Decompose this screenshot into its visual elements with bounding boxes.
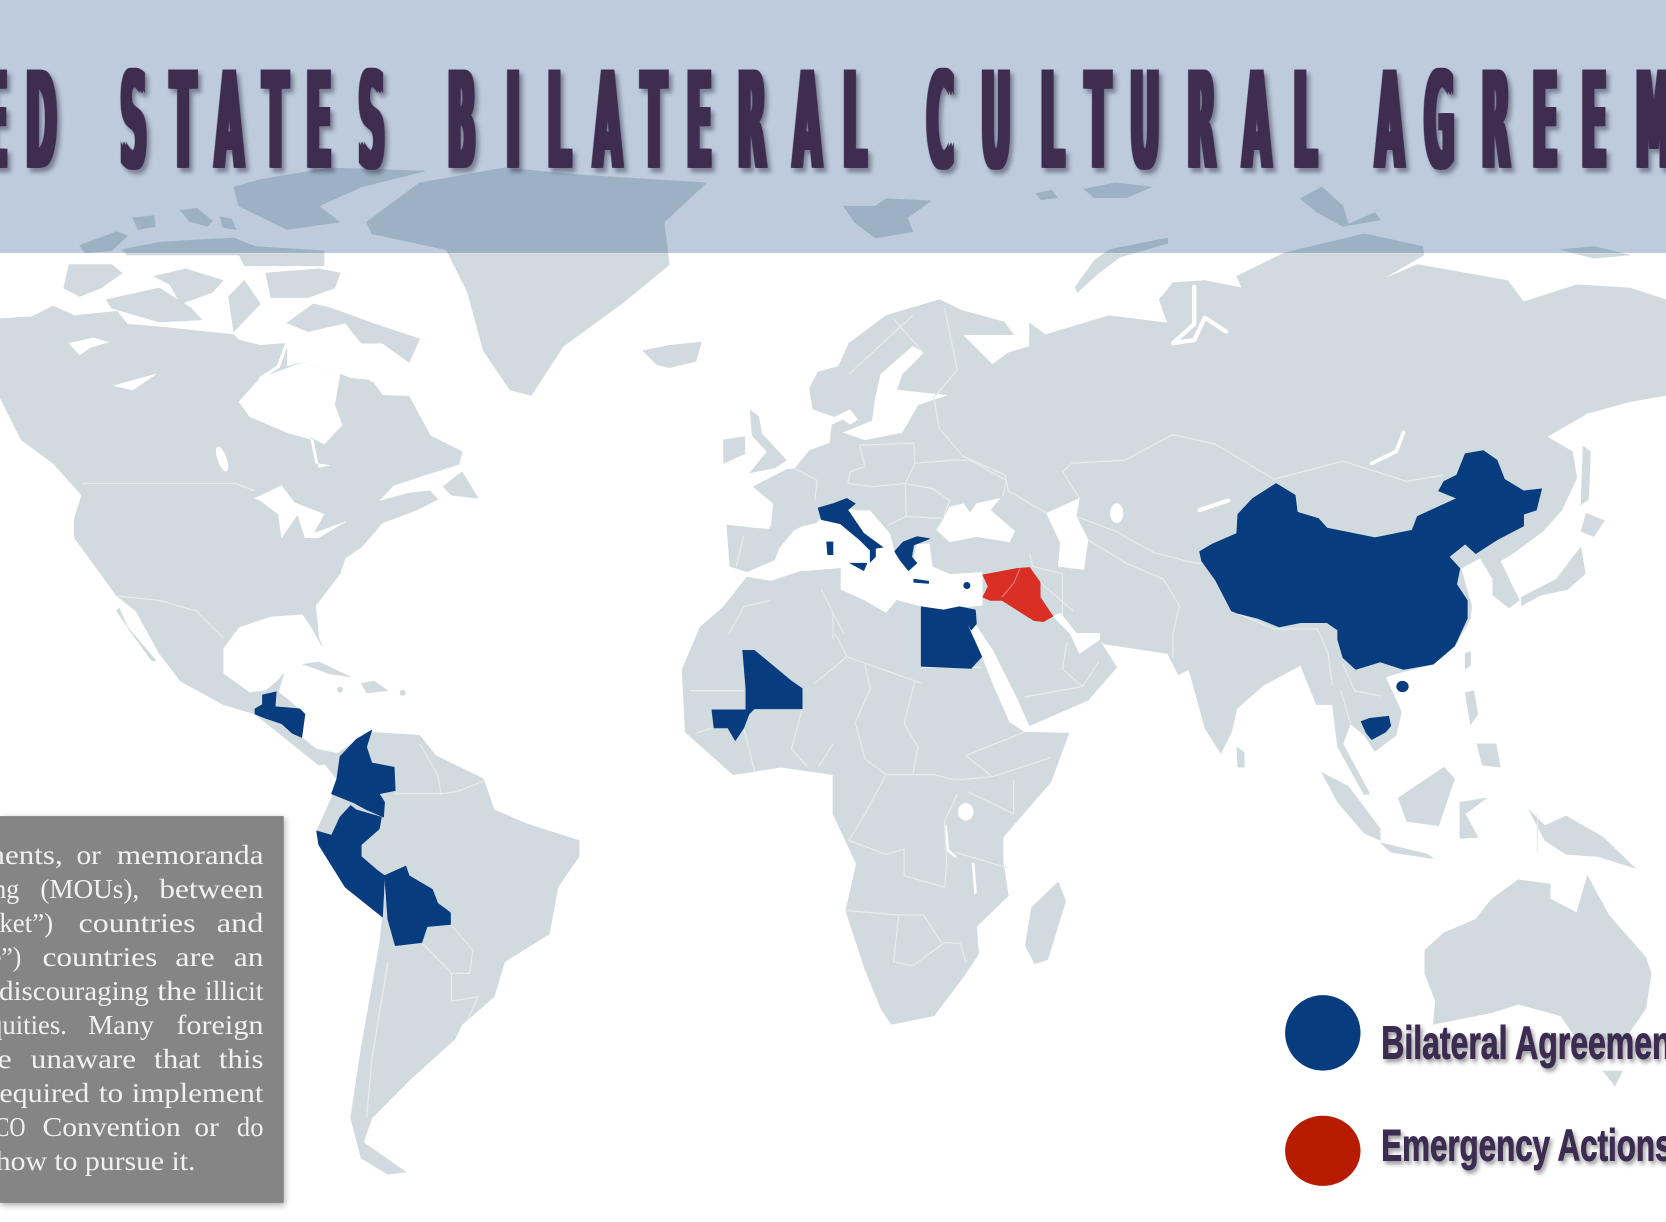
country: Cambodia	[1361, 716, 1391, 740]
country: Cyprus	[964, 582, 970, 589]
country: Greece	[895, 537, 930, 583]
country: Mali	[712, 650, 802, 741]
land: australia	[1425, 876, 1651, 1086]
countries: Central America	[255, 692, 305, 737]
legend	[1285, 995, 1666, 1186]
explanatory text: to	[99, 1077, 123, 1108]
explanatory text: Many	[88, 1009, 154, 1040]
african lakes	[946, 803, 975, 893]
seas and lakes of eurasia	[844, 287, 1404, 654]
land: iceland	[643, 342, 701, 368]
explanatory text: Convention	[42, 1111, 181, 1142]
explanatory text: and	[217, 907, 264, 938]
land: south america	[317, 732, 579, 1174]
explanatory text	[0, 839, 264, 1176]
explanatory text: discouraging	[0, 975, 149, 1006]
explanatory text: unaware	[31, 1043, 136, 1074]
explanatory text: illicit	[205, 975, 264, 1006]
legend swatch: bilateral agreements	[1285, 995, 1361, 1071]
explanatory text: (MOUs),	[40, 873, 139, 904]
country: Peru	[317, 805, 385, 917]
explanatory text: an	[234, 941, 264, 972]
land: caribbean islands	[303, 662, 405, 695]
country: Italy	[818, 498, 883, 571]
explanatory text: or	[76, 839, 101, 870]
country: Colombia	[332, 730, 395, 817]
land: africa	[682, 568, 1069, 1024]
explanatory text: do	[237, 1111, 263, 1142]
explanatory text: foreign	[176, 1009, 264, 1040]
explanatory text: countries	[42, 941, 157, 972]
explanatory text: this	[219, 1043, 264, 1074]
land: british isles	[724, 410, 786, 473]
land: madagascar	[1025, 882, 1066, 964]
explanatory text: the	[157, 975, 197, 1006]
explanatory text: memoranda	[117, 839, 264, 870]
explanatory text: that	[154, 1043, 201, 1074]
explanatory text: how to pursue it.	[0, 1145, 196, 1176]
legend swatch: emergency actions	[1285, 1116, 1361, 1186]
national borders	[82, 308, 1537, 1118]
country: Bolivia	[385, 866, 450, 946]
highlighted countries: emergency actions (Syria and Iraq)	[983, 567, 1053, 622]
highlighted countries: bilateral agreements	[255, 451, 1542, 946]
title banner	[0, 0, 1666, 253]
explanatory text: implement	[132, 1077, 264, 1108]
land: eurasia	[727, 234, 1666, 795]
land: north america	[0, 306, 462, 765]
country: Egypt	[921, 607, 982, 668]
explanatory text box	[0, 816, 284, 1203]
land: arctic canada islands	[64, 168, 478, 498]
country: China	[1200, 451, 1542, 692]
explanatory text: are	[175, 941, 215, 972]
land: asian islands	[844, 183, 1635, 868]
explanatory text: countries	[79, 907, 196, 938]
land: greenland	[367, 168, 707, 395]
explanatory text: or	[194, 1111, 219, 1142]
explanatory text: between	[159, 873, 264, 904]
